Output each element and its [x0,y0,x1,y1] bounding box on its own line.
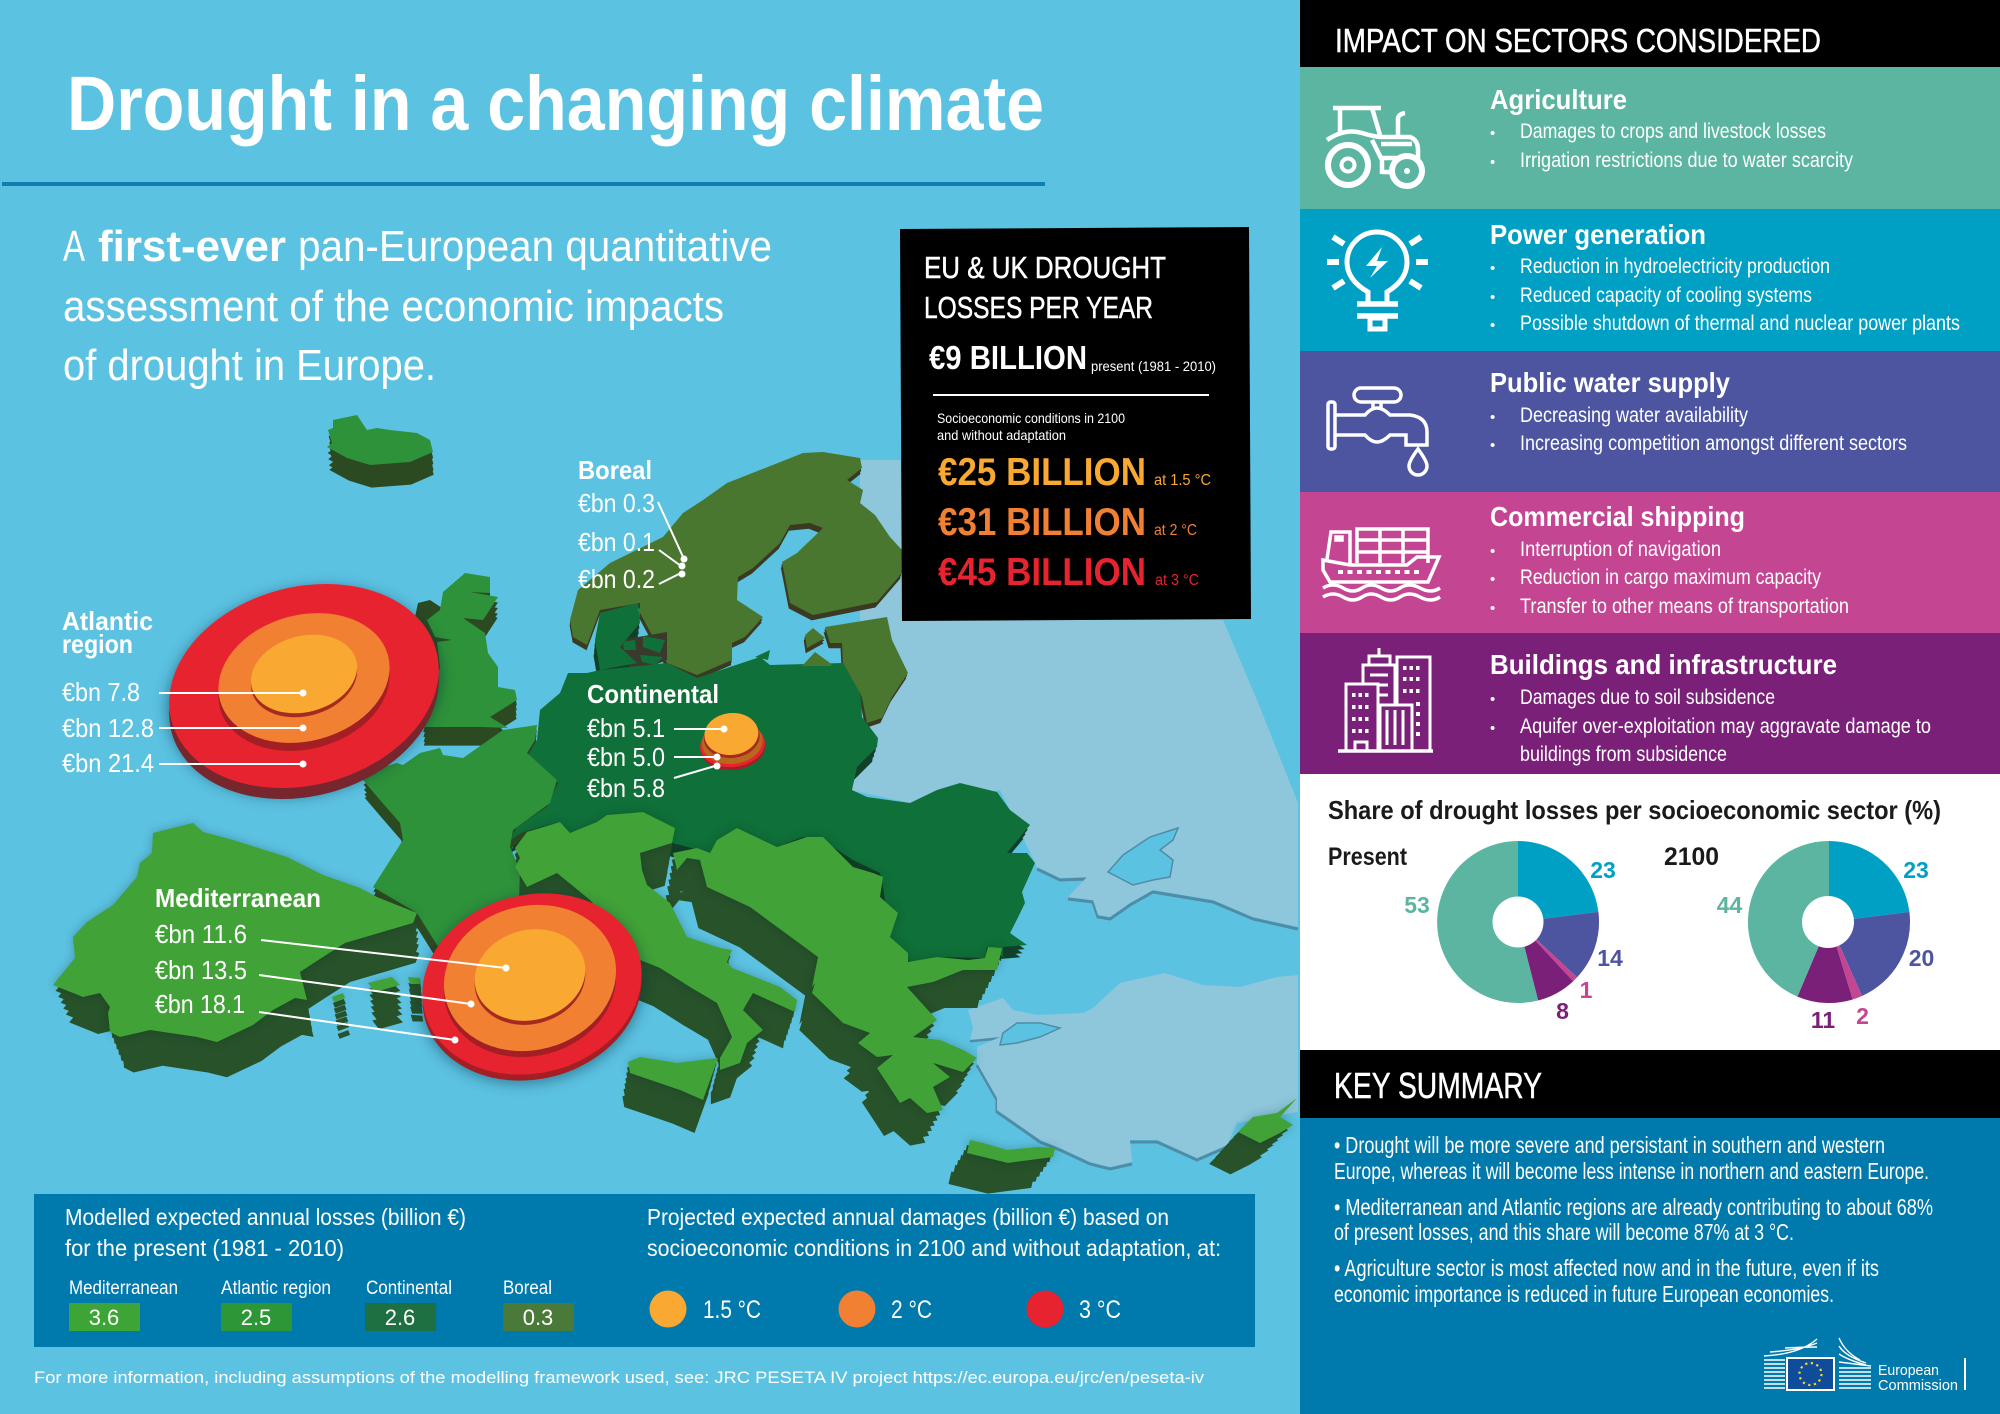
sector: Public water supply: Public water supply [1490,367,1730,398]
panel: EU & UK drought losses per year: €31 BILLION [938,501,1146,544]
panel: key summary text [1300,1118,2000,1414]
map label: Continental: Continental [587,679,719,709]
sector: Buildings and infrastructure: • [1490,720,1495,737]
legend: warming levels [650,1290,1121,1328]
legend: warming levels: 3 °C [1079,1296,1121,1324]
legend: present losses per region: Atlantic region [221,1278,331,1299]
background: sea [0,0,1300,1414]
panel: EU & UK drought losses per year: €45 BILLION [938,551,1146,594]
map: land extrusion sides [56,421,1292,1194]
heading: impact on sectors: IMPACT ON SECTORS CONSIDERED [1335,22,1821,59]
chart: present pie: 8 [1556,998,1569,1024]
sector: Power generation: Power generation [1490,219,1706,250]
panel: EU & UK drought losses per year: Socioeconomic conditions in 2100 [937,410,1125,426]
sector: Commercial shipping: Transfer to other means of transportation [1520,595,1849,618]
footer note: For more information, including assumptions of the modelling framework used, see: JRC PESETA IV project https://ec.europa.eu/jrc/en/peseta-iv [34,1368,1205,1387]
legend: present losses per region: Boreal [503,1278,552,1299]
sector: Buildings and infrastructure: Damages due to soil subsidence [1520,686,1775,709]
sector: Buildings and infrastructure: • [1490,691,1495,708]
subtitle [63,222,772,390]
map label: Mediterranean [155,883,321,1019]
panel: EU & UK drought losses per year: present (1981 - 2010) [1091,358,1216,374]
map: Denmark islands [615,632,667,672]
chart: present pie [1404,841,1623,1024]
sector: Power generation [1300,209,2000,351]
panel: key summary text: economic importance is reduced in future European economies. [1334,1281,1834,1307]
legend: present losses per region: 2.5 [241,1305,271,1330]
map: Atlantic region land [327,415,557,1000]
subtitle: of drought in Europe. [63,341,436,390]
map label: Atlantic region [62,606,154,778]
sector: Buildings and infrastructure: Buildings and infrastructure [1490,649,1837,680]
sector: Power generation: Reduction in hydroelectricity production [1520,255,1830,278]
map label: Atlantic region: €bn 21.4 [62,748,154,778]
sector: Agriculture: • [1490,125,1495,142]
map label: Boreal: €bn 0.1 [578,527,655,557]
map label: Continental: €bn 5.8 [587,773,665,803]
legend: present losses per region: 0.3 [523,1305,553,1330]
map label: Continental: €bn 5.1 [587,713,665,743]
leader lines and dots [159,502,728,1044]
panel: legend: Projected expected annual damages (billion €) based on [647,1204,1169,1230]
sector: Commercial shipping: Commercial shipping [1490,501,1745,532]
sector: Commercial shipping: • [1490,571,1495,588]
icon: tractor [1327,108,1422,186]
icon: container ship [1323,529,1440,600]
panel: share of drought losses: 2100 [1664,843,1719,871]
chart: 2100 pie: 44 [1717,892,1742,918]
panel: share of drought losses [1328,795,1941,1033]
logo: European Commission: Commission [1878,1377,1958,1394]
map label: Atlantic region: €bn 12.8 [62,713,154,743]
heading: key summary: KEY SUMMARY [1334,1065,1542,1106]
sector: Commercial shipping: Reduction in cargo maximum capacity [1520,566,1821,589]
heading: key summary [1300,1050,2000,1118]
panel: legend: Modelled expected annual losses (billion €) [65,1204,466,1230]
sector: Power generation: Reduced capacity of cooling systems [1520,284,1812,307]
map label: Continental [587,679,719,803]
map of Europe [53,415,1298,1194]
panel: key summary text: of present losses, and this share will become 87% at 3 °C. [1334,1219,1794,1245]
panel: EU & UK drought losses per year: LOSSES PER YEAR [924,290,1153,325]
sector: Buildings and infrastructure: Aquifer over-exploitation may aggravate damage to [1520,715,1931,738]
chart: 2100 pie: 20 [1909,945,1934,971]
subtitle: pan-European quantitative [298,222,772,271]
logo: European Commission [1764,1338,1966,1394]
chart: present pie: 53 [1404,892,1430,918]
map label: Atlantic region: Atlantic [62,606,153,636]
sector: Public water supply [1300,351,2000,492]
panel: EU & UK drought losses per year: and without adaptation [937,427,1066,443]
right column: background [1300,0,2000,1414]
panel: legend [34,1194,1255,1347]
legend: present losses per region: 3.6 [89,1305,119,1330]
map label: Boreal: €bn 0.3 [578,488,655,518]
sector: Public water supply: Decreasing water availability [1520,404,1748,427]
sector: Public water supply: Increasing competition amongst different sectors [1520,432,1907,455]
chart: 2100 pie: 23 [1903,857,1929,883]
sector: Public water supply: • [1490,437,1495,454]
bubble: Atlantic region [143,555,465,828]
chart: 2100 pie: 11 [1811,1007,1835,1033]
sector: Agriculture: Irrigation restrictions due to water scarcity [1520,149,1853,172]
subtitle: first-ever [98,222,286,271]
panel: EU & UK drought losses per year: at 2 °C [1154,522,1197,539]
sector: Agriculture: Agriculture [1490,84,1627,115]
legend: present losses per region: 2.6 [385,1305,415,1330]
map label: Continental: €bn 5.0 [587,742,665,772]
panel: share of drought losses: Share of drought losses per socioeconomic sector (%) [1328,795,1941,825]
subtitle: A [63,222,85,271]
panel: EU & UK drought losses per year: €25 BILLION [938,451,1146,494]
sector: Agriculture [1300,67,2000,209]
map: Mediterranean region land [53,812,1297,1163]
bubble: Mediterranean [399,869,665,1108]
sector: Buildings and infrastructure: buildings from subsidence [1520,743,1727,766]
chart: 2100 pie: 2 [1856,1003,1869,1029]
chart: 2100 pie [1717,841,1934,1033]
sector: Agriculture: Damages to crops and livestock losses [1520,120,1826,143]
legend: present losses per region [69,1278,574,1331]
icon: light bulb [1327,232,1428,329]
title: Drought in a changing climate [67,61,1044,147]
map: Baltic fragments [755,650,832,666]
chart: present pie: 23 [1590,857,1616,883]
sector: Public water supply: • [1490,409,1495,426]
bubble: Continental [697,710,767,773]
map label: Mediterranean: €bn 13.5 [155,955,247,985]
sector: Commercial shipping: • [1490,543,1495,560]
panel: legend: for the present (1981 - 2010) [65,1235,344,1261]
legend: warming levels: 1.5 °C [703,1296,761,1324]
map label: Boreal: Boreal [578,455,652,485]
sector: Commercial shipping [1300,492,2000,633]
sector: Buildings and infrastructure [1300,633,2000,774]
sector: Power generation: • [1490,289,1495,306]
legend: present losses per region: Mediterranean [69,1278,178,1299]
map label: Boreal [578,455,655,594]
map label: Mediterranean: €bn 18.1 [155,989,245,1019]
logo: European Commission: European [1878,1362,1939,1379]
panel: EU & UK drought losses per year: €9 BILLION [929,339,1087,376]
panel: share of drought losses: Present [1328,843,1408,871]
chart: present pie: 1 [1580,977,1593,1003]
legend: present losses per region: Continental [366,1278,452,1299]
icon: buildings [1338,648,1433,751]
map: non-EU land [850,460,1298,1169]
map label: Boreal: €bn 0.2 [578,564,655,594]
icon: water tap [1328,388,1427,475]
map label: Mediterranean: Mediterranean [155,883,321,913]
subtitle: assessment of the economic impacts [63,282,724,331]
sector: Commercial shipping: Interruption of navigation [1520,538,1721,561]
sector: Agriculture: • [1490,154,1495,171]
map label: Atlantic region: €bn 7.8 [62,677,140,707]
panel: EU & UK drought losses per year: EU & UK DROUGHT [924,250,1166,285]
sector: Power generation: • [1490,317,1495,334]
map: Boreal region land [570,452,908,723]
legend: warming levels: 2 °C [891,1296,932,1324]
map: Continental region land [510,603,1035,962]
sector: Power generation: • [1490,260,1495,277]
sector: Commercial shipping: • [1490,600,1495,617]
panel: legend: socioeconomic conditions in 2100 and without adaptation, at: [647,1235,1221,1261]
panel: EU & UK drought losses per year [900,227,1251,621]
map label: Atlantic region: region [62,629,133,659]
chart: present pie: 14 [1597,945,1623,971]
map: shadow of southern land [53,812,1297,1163]
panel: EU & UK drought losses per year: at 3 °C [1155,572,1199,589]
panel: EU & UK drought losses per year: at 1.5 °C [1154,472,1211,489]
map label: Mediterranean: €bn 11.6 [155,919,247,949]
heading: impact on sectors [1300,0,2000,67]
